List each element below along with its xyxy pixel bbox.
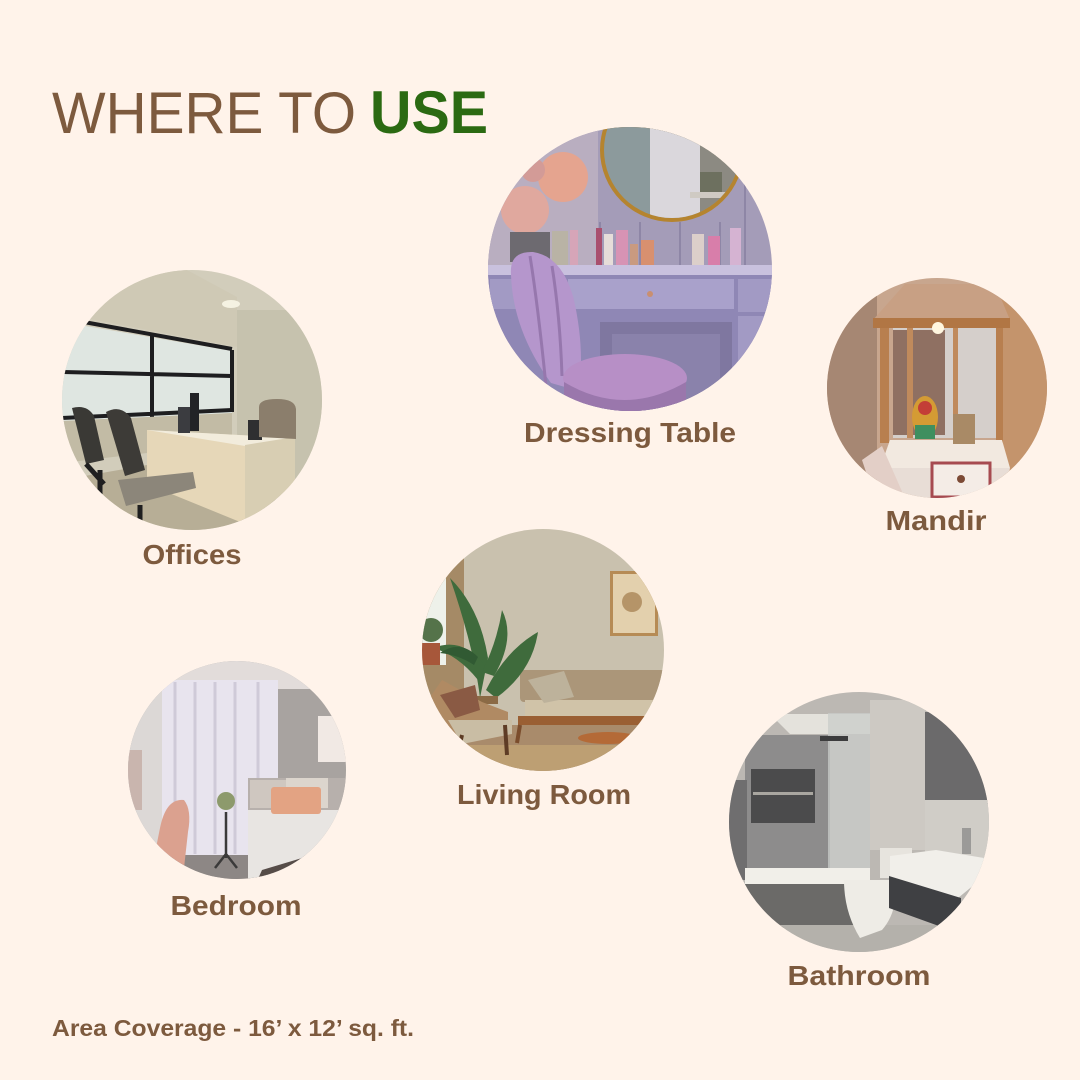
photo: bathroom	[729, 692, 989, 955]
photo: living room	[419, 529, 665, 771]
area coverage note: Area Coverage - 16’ x 12’ sq. ft.	[52, 1015, 414, 1041]
label: dressing table: Dressing Table	[524, 417, 736, 448]
label: offices: Offices	[142, 539, 242, 570]
title	[52, 79, 488, 146]
sofa	[517, 670, 665, 743]
title: USE	[370, 79, 488, 146]
label: living room: Living Room	[457, 779, 631, 810]
photo: dressing table	[488, 127, 772, 411]
plant	[433, 578, 538, 698]
photo: bedroom	[128, 661, 346, 885]
photo: mandir	[827, 278, 1050, 498]
label: bathroom: Bathroom	[788, 960, 930, 991]
photo: offices	[62, 270, 322, 530]
title: WHERE TO	[52, 81, 356, 146]
label: mandir: Mandir	[886, 505, 987, 536]
label: bedroom: Bedroom	[170, 890, 302, 921]
